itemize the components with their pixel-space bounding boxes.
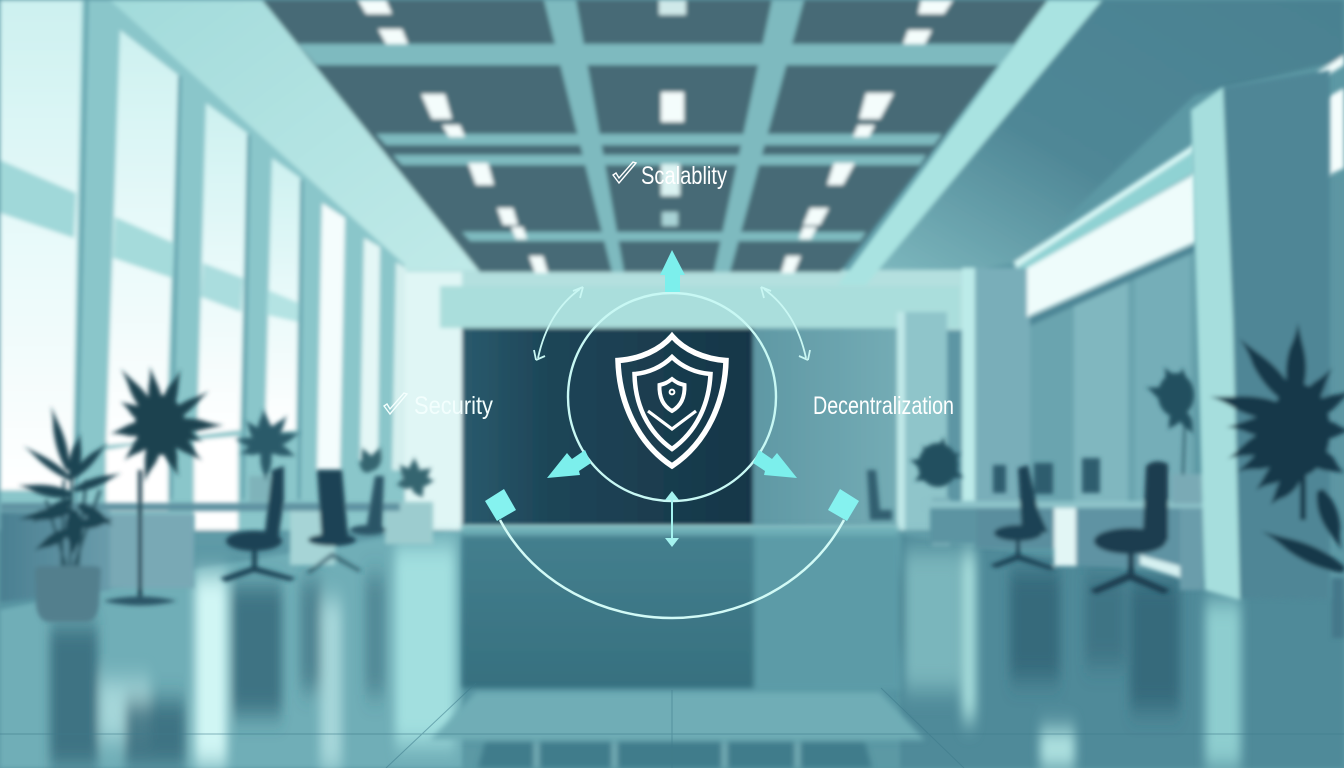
small shield (659, 379, 685, 411)
bottom light slats (534, 742, 800, 768)
lower arc connector (500, 520, 844, 618)
left desk (0, 503, 400, 511)
left ceiling (108, 0, 500, 290)
side wall by dark screen (405, 272, 462, 540)
right cabinets (930, 508, 976, 543)
mid tone wall panel (753, 328, 899, 527)
dark furniture reflections (50, 570, 1180, 768)
upper back wall band (440, 286, 960, 328)
security text: Security (414, 392, 493, 420)
mid panel reflection (754, 534, 900, 690)
far right wall (1322, 178, 1344, 603)
plant stems (46, 470, 100, 566)
right column dark face (1220, 70, 1330, 600)
scalability text: Scalablity (641, 162, 727, 190)
center double arrow (665, 491, 679, 547)
right desk (925, 501, 1203, 508)
shield chevron (648, 411, 696, 429)
tall palm (103, 365, 224, 606)
upper right curved double arrow (761, 287, 810, 360)
check icon (384, 393, 407, 414)
large right plant (1207, 321, 1344, 638)
dark wall panel (462, 328, 753, 526)
label: security (384, 392, 493, 420)
upper left curved double arrow (534, 287, 583, 360)
left chair two (306, 470, 362, 574)
outer shield (618, 336, 726, 466)
column reflections (905, 550, 960, 690)
back wall (400, 270, 1030, 540)
small far plants (355, 444, 435, 501)
plant pot (35, 566, 101, 622)
label: decentralization: Decentralization (813, 392, 954, 420)
glowing cove light (1027, 173, 1196, 317)
central ring (568, 293, 776, 501)
center floor (430, 526, 925, 768)
right small plant (1143, 364, 1202, 504)
ceiling lights (358, 0, 953, 273)
dark bottom tiles (478, 742, 872, 768)
center right column (897, 312, 947, 540)
right chair one (990, 465, 1056, 570)
lower left arrow: security (547, 450, 591, 478)
right chair two (1090, 461, 1170, 594)
floor (0, 530, 1344, 768)
right column light edge (1191, 87, 1240, 600)
right glass wall (1030, 250, 1195, 560)
shield icon (618, 336, 726, 466)
shield keyhole dot (670, 390, 674, 394)
left chair three (350, 476, 386, 535)
top arrow: scalability (660, 250, 685, 292)
office furniture and plants (0, 70, 1344, 638)
right ceiling (850, 0, 1344, 290)
left chair one (220, 466, 296, 582)
floor reflections (50, 545, 1241, 768)
left window wall (0, 0, 406, 610)
ceiling grid beams (298, 0, 1014, 272)
left square node (485, 489, 516, 521)
check icon (613, 162, 636, 183)
mid plant and chair (867, 435, 966, 546)
left plant in pot (17, 404, 123, 622)
dark ceiling panels (262, 0, 1048, 272)
floor tile lines (0, 683, 1344, 768)
lower right arrow: decentralization (753, 450, 797, 478)
monitors (993, 458, 1100, 494)
bright right ceiling beam (838, 0, 1102, 285)
bright window reflections (100, 545, 455, 768)
left cabinets (0, 512, 110, 602)
plant leaves (46, 404, 73, 471)
bright floor band (430, 692, 925, 740)
diagram overlay (384, 162, 954, 618)
dark wall reflection (462, 534, 754, 688)
window plant (233, 408, 302, 502)
skirting band (462, 526, 898, 535)
window frame shadows (76, 0, 302, 510)
inner shield (634, 357, 710, 449)
label: scalability (613, 162, 727, 190)
right square node (828, 489, 859, 521)
